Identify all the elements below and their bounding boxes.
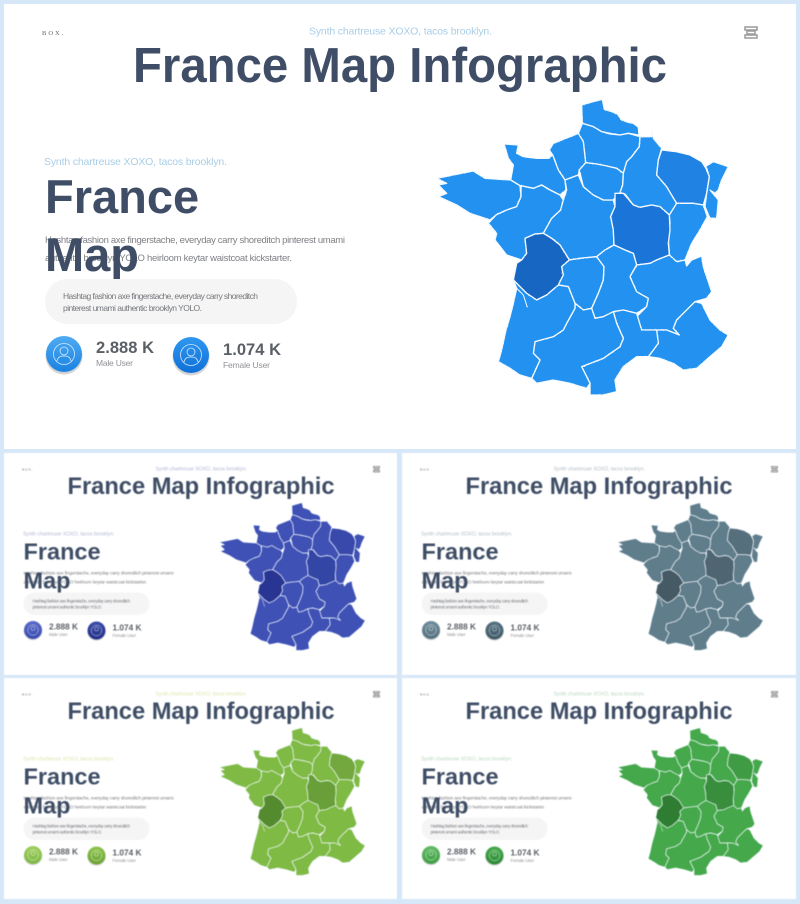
body text: Hashtag fashion axe fingerstache, everyday carry shoreditch pinterest umami — [24, 570, 174, 576]
subtitle: Synth chartreuse XOXO, tacos brooklyn. — [23, 532, 114, 538]
stat: female user: 1.074 K — [112, 624, 142, 632]
body text: Hashtag fashion axe fingerstache, everyday carry shoreditch pinterest umami — [24, 796, 174, 802]
top tagline: Synth chartreuse XOXO, tacos brooklyn. — [554, 466, 645, 472]
callout pill — [422, 592, 548, 615]
brand label: BOX. — [22, 468, 34, 472]
subtitle: Synth chartreuse XOXO, tacos brooklyn. — [421, 532, 512, 538]
icon: female user — [87, 846, 106, 866]
callout pill — [24, 592, 150, 615]
icon: female user — [485, 622, 504, 641]
callout pill: pinterest umami authentic brooklyn YOLO. — [430, 830, 500, 834]
icon: menu logo — [374, 466, 380, 472]
stat: female user: Female User — [223, 360, 270, 370]
heading: France Map: France — [45, 170, 199, 223]
icon: male user — [24, 846, 42, 865]
callout pill: pinterest umami authentic brooklyn YOLO. — [63, 303, 202, 313]
panel: indigo slide — [4, 453, 397, 675]
stat: male user: Male User — [96, 358, 133, 368]
body text — [45, 235, 345, 264]
map: France indigo — [219, 503, 365, 650]
stat: female user: Female User — [510, 633, 535, 638]
stat: male user: Male User — [49, 857, 68, 862]
map: France lime — [219, 728, 365, 875]
title: France Map Infographic — [133, 39, 667, 93]
icon: male user — [422, 621, 440, 640]
stat: female user: 1.074 K — [223, 341, 281, 359]
subtitle: Synth chartreuse XOXO, tacos brooklyn. — [421, 756, 512, 762]
body text: authentic brooklyn YOLO heirloom keytar waistcoat kickstarter. — [45, 253, 292, 264]
icon: male user — [422, 846, 440, 865]
top tagline: Synth chartreuse XOXO, tacos brooklyn. — [554, 691, 645, 697]
callout pill: Hashtag fashion axe fingerstache, everyday carry shoreditch — [32, 824, 131, 828]
brand label: BOX. — [22, 692, 34, 696]
title: France Map Infographic — [68, 473, 334, 500]
stat: female user — [510, 624, 540, 638]
panel: slate slide — [402, 453, 796, 675]
title: France Map Infographic — [466, 698, 732, 725]
panel: green slide — [402, 678, 796, 899]
callout pill: pinterest umami authentic brooklyn YOLO. — [430, 604, 500, 610]
brand label: BOX. — [420, 692, 432, 696]
body text: authentic brooklyn YOLO heirloom keytar waistcoat kickstarter. — [422, 804, 545, 810]
callout pill — [24, 818, 150, 840]
icon: menu logo — [772, 466, 778, 472]
heading: France Map: Map — [24, 792, 70, 818]
stat: female user: 1.074 K — [510, 624, 540, 632]
stat: female user — [112, 624, 142, 638]
heading: France Map: Map — [24, 568, 70, 594]
heading: France Map: France — [24, 538, 101, 564]
stat: female user: Female User — [112, 858, 137, 863]
body text: authentic brooklyn YOLO heirloom keytar waistcoat kickstarter. — [24, 804, 147, 810]
body text: authentic brooklyn YOLO heirloom keytar waistcoat kickstarter. — [422, 580, 545, 586]
stat: female user — [510, 848, 540, 863]
stat: male user — [447, 622, 476, 637]
stat: male user: 2.888 K — [447, 848, 476, 856]
body text — [24, 570, 174, 586]
stat: male user — [96, 339, 154, 368]
top tagline: Synth chartreuse XOXO, tacos brooklyn. — [156, 466, 247, 472]
stat: male user: 2.888 K — [96, 339, 154, 357]
stat: female user: Female User — [510, 858, 535, 863]
heading: France Map: France — [24, 764, 101, 790]
callout pill: Hashtag fashion axe fingerstache, everyday carry shoreditch — [63, 291, 258, 301]
stat: male user: Male User — [447, 857, 466, 862]
body text: Hashtag fashion axe fingerstache, everyday carry shoreditch pinterest umami — [422, 570, 572, 576]
stat: male user — [447, 848, 476, 862]
stat: male user: Male User — [447, 632, 466, 637]
stat: female user: Female User — [112, 633, 137, 638]
stat: female user: 1.074 K — [112, 848, 142, 858]
callout pill: pinterest umami authentic brooklyn YOLO. — [32, 830, 102, 834]
heading: France Map — [45, 170, 199, 281]
heading: France Map — [422, 764, 499, 818]
body text — [422, 570, 572, 586]
callout pill — [422, 818, 548, 840]
panel: blue main slide — [4, 4, 796, 449]
heading: France Map: France — [422, 764, 499, 790]
icon: female user — [87, 622, 106, 641]
body text: Hashtag fashion axe fingerstache, everyday carry shoreditch pinterest umami — [422, 796, 572, 802]
callout pill: Hashtag fashion axe fingerstache, everyday carry shoreditch — [430, 598, 529, 604]
heading: France Map: Map — [45, 228, 139, 281]
stat: male user — [49, 622, 78, 637]
body text — [24, 796, 174, 810]
subtitle: Synth chartreuse XOXO, tacos brooklyn. — [23, 756, 114, 762]
icon: male user — [46, 336, 82, 374]
icon: male user — [24, 621, 42, 640]
icon: female user — [172, 337, 210, 376]
map: France blue — [437, 99, 728, 395]
callout pill — [45, 279, 297, 324]
callout pill: Hashtag fashion axe fingerstache, everyday carry shoreditch — [32, 598, 131, 604]
stat: female user — [112, 848, 142, 863]
stat: male user: Male User — [49, 632, 68, 637]
map: France slate — [617, 503, 763, 650]
subtitle: Synth chartreuse XOXO, tacos brooklyn. — [44, 156, 227, 168]
brand label: BOX. — [420, 468, 432, 472]
heading: France Map: France — [422, 538, 499, 564]
stat: male user: 2.888 K — [447, 622, 476, 632]
callout pill: pinterest umami authentic brooklyn YOLO. — [32, 604, 102, 610]
stat: female user — [223, 341, 281, 370]
brand label: BOX. — [42, 30, 65, 37]
stat: female user: 1.074 K — [510, 848, 540, 858]
top tagline: Synth chartreuse XOXO, tacos brooklyn. — [309, 26, 492, 38]
stat: male user: 2.888 K — [49, 622, 78, 632]
heading: France Map — [422, 538, 499, 594]
icon: menu logo — [745, 27, 757, 38]
heading: France Map — [24, 764, 101, 818]
callout pill: Hashtag fashion axe fingerstache, everyday carry shoreditch — [430, 824, 529, 828]
body text: Hashtag fashion axe fingerstache, everyday carry shoreditch pinterest umami — [45, 235, 345, 246]
heading: France Map: Map — [422, 568, 468, 594]
icon: female user — [485, 846, 504, 866]
body text — [422, 796, 572, 810]
body text: authentic brooklyn YOLO heirloom keytar waistcoat kickstarter. — [24, 580, 147, 586]
panel: lime slide — [4, 678, 397, 899]
heading: France Map: Map — [422, 792, 468, 818]
map: France green — [617, 728, 763, 875]
top tagline: Synth chartreuse XOXO, tacos brooklyn. — [156, 691, 247, 697]
icon: menu logo — [374, 692, 380, 697]
title: France Map Infographic — [466, 473, 732, 500]
heading: France Map — [24, 538, 101, 594]
title: France Map Infographic — [68, 698, 334, 725]
stat: male user — [49, 848, 78, 862]
icon: menu logo — [772, 692, 778, 697]
stat: male user: 2.888 K — [49, 848, 78, 856]
